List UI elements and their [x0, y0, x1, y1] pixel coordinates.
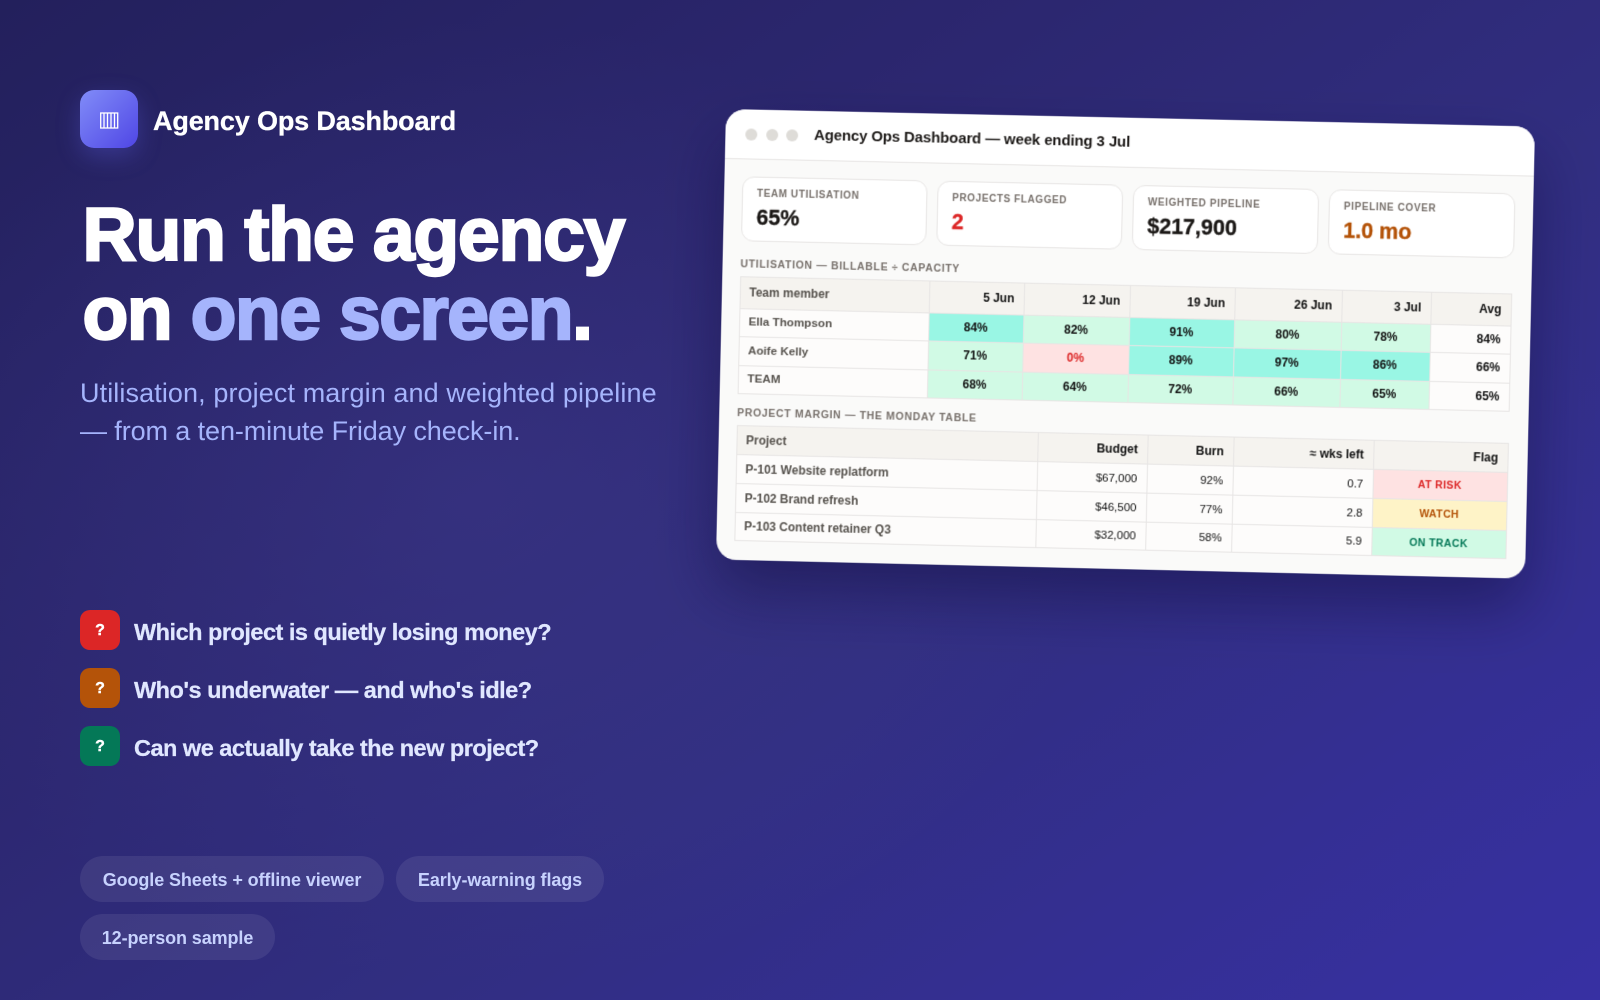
tag: Early-warning flags: [396, 856, 604, 902]
KPI: weighted pipeline: $217,900: [1147, 214, 1237, 240]
project margin table: P-101 Website replatform: [745, 462, 889, 479]
project margin table: ≈ wks left: [1310, 446, 1364, 461]
panel: dashboard window: [716, 109, 1535, 579]
utilisation table: Ella Thompson: [749, 315, 832, 330]
logo icon: [80, 90, 138, 148]
utilisation table: 3 Jul: [1394, 299, 1421, 314]
utilisation table: Aoife Kelly: [748, 344, 808, 358]
utilisation table: 84%: [964, 320, 988, 334]
utilisation table: 19 Jun: [1187, 295, 1225, 310]
project margin table: WATCH: [1419, 508, 1459, 521]
project margin table: $46,500: [1095, 501, 1137, 514]
question 2: [80, 668, 532, 708]
subtitle: — from a ten-minute Friday check-in.: [80, 416, 521, 446]
KPI: weighted pipeline: [1132, 185, 1319, 254]
utilisation table: 66%: [1476, 360, 1500, 374]
title: [82, 192, 627, 355]
utilisation table: 82%: [1064, 322, 1088, 337]
title: on one screen.: [82, 271, 592, 355]
utilisation table: 72%: [1168, 381, 1192, 396]
tag: Early-warning flags: Early-warning flags: [418, 870, 582, 890]
project margin table: $32,000: [1094, 529, 1136, 542]
subtitle: Utilisation, project margin and weighted pipeline: [80, 378, 657, 408]
utilisation table: 91%: [1169, 324, 1194, 339]
question 3: ?: [95, 738, 105, 755]
question 2: Who's underwater — and who's idle?: [134, 677, 532, 703]
project margin table: $67,000: [1096, 472, 1137, 485]
KPI: team utilisation: 65%: [756, 206, 800, 231]
tag: 12-person sample: [80, 914, 275, 960]
project margin table: Budget: [1096, 441, 1138, 456]
KPI: pipeline cover: [1328, 189, 1515, 258]
KPI: projects flagged: 2: [951, 210, 964, 234]
window title bar: Agency Ops Dashboard — week ending 3 Jul: [814, 127, 1130, 151]
utilisation table: 65%: [1372, 386, 1396, 401]
project margin table: 77%: [1199, 503, 1223, 516]
tag: Google Sheets: Google Sheets + offline viewer: [103, 870, 361, 890]
KPI: pipeline cover: 1.0 mo: [1343, 219, 1412, 244]
utilisation table: 89%: [1169, 353, 1193, 367]
KPI: team utilisation: TEAM UTILISATION: [757, 189, 859, 202]
utilisation table: 66%: [1274, 384, 1298, 398]
section label: utilisation: UTILISATION — BILLABLE ÷ CAPACITY: [740, 258, 960, 275]
project margin table: P-103 Content retainer Q3: [744, 519, 891, 537]
project margin table: P-102 Brand refresh: [745, 491, 858, 507]
project margin table: Flag: [1473, 450, 1498, 464]
project margin table: 2.8: [1346, 507, 1363, 519]
utilisation table: Team member: [749, 285, 830, 301]
question 3: Can we actually take the new project?: [134, 735, 539, 761]
utilisation table: Avg: [1479, 301, 1502, 316]
utilisation table: 0%: [1067, 351, 1084, 365]
project margin table: Project: [746, 433, 787, 448]
utilisation table: 97%: [1275, 355, 1299, 370]
project margin table: [734, 425, 1509, 560]
tag: 12-person sample: 12-person sample: [102, 928, 253, 948]
utilisation table: 86%: [1373, 358, 1397, 372]
project margin table: AT RISK: [1418, 479, 1462, 492]
project margin table: 0.7: [1347, 478, 1363, 490]
question 1: Which project is quietly losing money?: [134, 619, 551, 645]
question 1: [80, 610, 551, 650]
utilisation table: 71%: [963, 348, 987, 363]
KPI: projects flagged: [936, 181, 1123, 249]
utilisation table: 65%: [1475, 388, 1500, 403]
project margin table: 58%: [1199, 532, 1222, 544]
utilisation table: 68%: [962, 377, 987, 391]
title: Run the agency: [82, 192, 624, 276]
brand name: Agency Ops Dashboard: [153, 106, 456, 136]
project margin table: Burn: [1196, 443, 1224, 458]
utilisation table: 26 Jun: [1294, 297, 1332, 312]
project margin table: ON TRACK: [1409, 536, 1468, 550]
question 2: ?: [95, 680, 105, 697]
KPI: projects flagged: PROJECTS FLAGGED: [952, 193, 1067, 206]
utilisation table: 12 Jun: [1082, 292, 1120, 307]
KPI: team utilisation: [741, 176, 928, 245]
KPI: weighted pipeline: WEIGHTED PIPELINE: [1148, 197, 1260, 211]
window title bar: [725, 109, 1535, 177]
section label: project margin: PROJECT MARGIN — THE MONDAY TABLE: [737, 407, 977, 425]
utilisation table: 64%: [1063, 379, 1087, 394]
project margin table: 92%: [1200, 474, 1223, 487]
subtitle: [80, 378, 657, 446]
utilisation table: TEAM: [747, 372, 781, 386]
utilisation table: [738, 276, 1512, 412]
utilisation table: 84%: [1476, 331, 1501, 346]
question 3: [80, 726, 539, 766]
utilisation table: 5 Jun: [983, 290, 1015, 305]
utilisation table: 80%: [1275, 327, 1300, 341]
KPI: pipeline cover: PIPELINE COVER: [1344, 202, 1436, 215]
tag: Google Sheets: [80, 856, 384, 902]
utilisation table: 78%: [1373, 329, 1398, 344]
question 1: ?: [95, 622, 105, 639]
project margin table: 5.9: [1346, 535, 1362, 548]
